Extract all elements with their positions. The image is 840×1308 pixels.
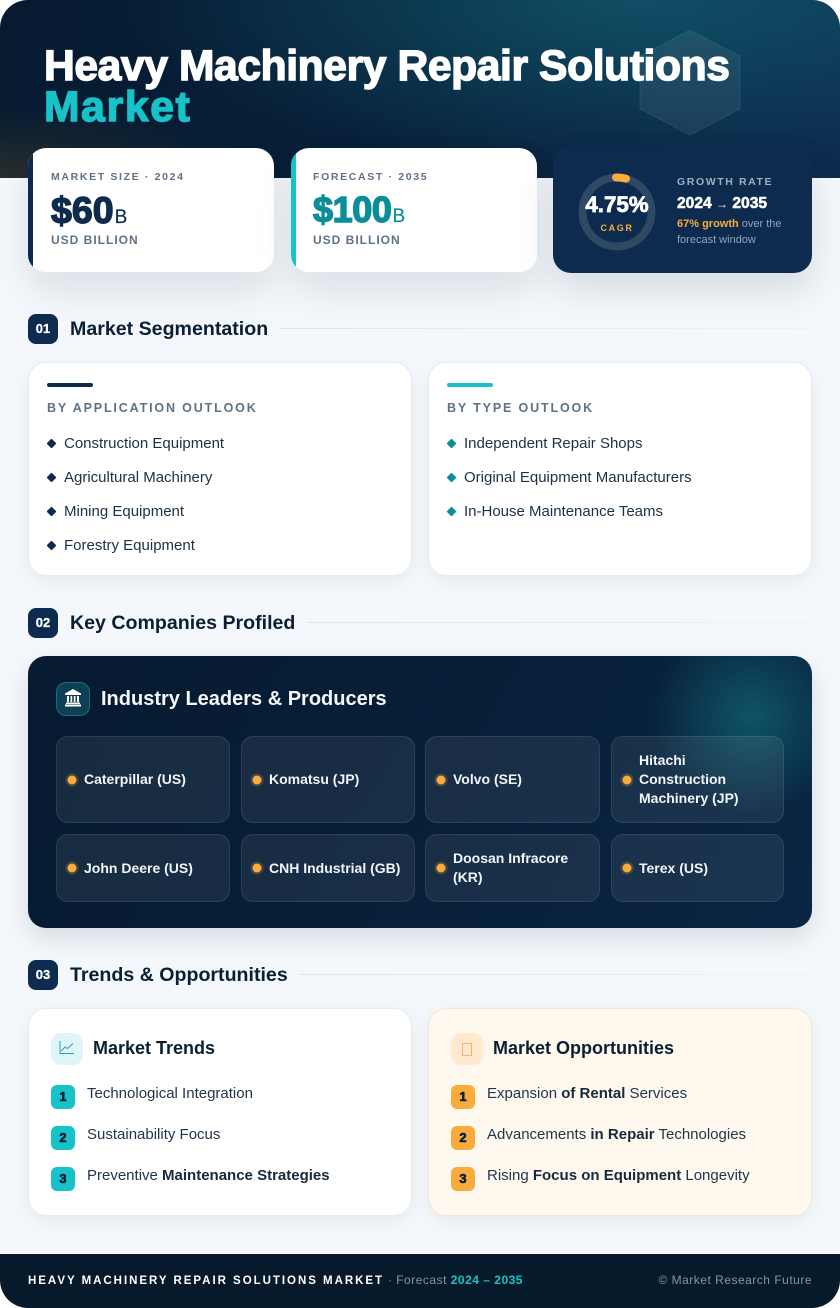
panel: application outlook: BY APPLICATION OUTLOOK bbox=[47, 401, 258, 415]
title: Market bbox=[44, 83, 192, 131]
panel: type outlook: BY TYPE OUTLOOK bbox=[447, 401, 594, 415]
section heading: 01 bbox=[28, 314, 740, 344]
icon: classical building bbox=[56, 682, 90, 716]
panel: market opportunities: Expansion of Rental Services bbox=[487, 1085, 687, 1102]
company: Komatsu: Komatsu (JP) bbox=[269, 771, 359, 787]
CAGR value: 4.75% bbox=[585, 192, 649, 217]
panel: market trends: Market Trends bbox=[93, 1038, 215, 1058]
trend 2: 2 bbox=[59, 1130, 67, 1145]
section heading: 03: 03 bbox=[36, 967, 50, 982]
company: Volvo: Volvo (SE) bbox=[453, 771, 522, 787]
panel: application outlook: Forestry Equipment bbox=[64, 537, 195, 554]
panel: type outlook: In-House Maintenance Teams bbox=[464, 503, 663, 520]
opportunity 3: 3 bbox=[459, 1171, 467, 1186]
panel: market opportunities: Rising Focus on Equipment Longevity bbox=[487, 1167, 750, 1184]
panel: market trends: Preventive Maintenance Strategies bbox=[87, 1167, 330, 1184]
section heading: 03: Trends & Opportunities bbox=[70, 964, 288, 986]
company: Terex bbox=[611, 834, 784, 902]
company: Hitachi: Construction bbox=[639, 771, 726, 787]
panel: type outlook bbox=[428, 362, 812, 576]
panel: type outlook: Independent Repair Shops bbox=[464, 435, 642, 452]
icon: placeholder glyph bbox=[451, 1033, 483, 1065]
company: Volvo bbox=[425, 736, 600, 823]
company: Hitachi: Hitachi bbox=[639, 752, 686, 768]
company: CNH Industrial: CNH Industrial (GB) bbox=[269, 860, 400, 876]
footer bbox=[0, 1254, 840, 1308]
panel: type outlook: Original Equipment Manufacturers bbox=[464, 469, 692, 486]
company: Caterpillar bbox=[56, 736, 230, 823]
company: Hitachi: Machinery (JP) bbox=[639, 790, 739, 806]
panel: market opportunities: Advancements in Repair Technologies bbox=[487, 1126, 746, 1143]
company: Terex: Terex (US) bbox=[639, 860, 708, 876]
company: John Deere: John Deere (US) bbox=[84, 860, 193, 876]
panel: application outlook bbox=[28, 362, 412, 576]
decorative hexagon bbox=[640, 30, 740, 136]
donut gauge bbox=[578, 174, 656, 250]
company: Doosan Infracore bbox=[425, 834, 600, 902]
title bbox=[44, 42, 729, 131]
company: Caterpillar: Caterpillar (US) bbox=[84, 771, 186, 787]
panel: application outlook: Construction Equipment bbox=[64, 435, 224, 452]
section heading: 02 bbox=[28, 608, 744, 638]
panel: industry leaders bbox=[28, 656, 812, 928]
stat card: forecast: FORECAST · 2035 bbox=[313, 171, 428, 183]
company: Doosan Infracore: Doosan Infracore bbox=[453, 850, 568, 866]
footer credit: © Market Research Future bbox=[658, 1273, 812, 1287]
stat card: market size: $60B bbox=[51, 189, 127, 231]
company: Doosan Infracore: (KR) bbox=[453, 869, 483, 885]
trend 1: 1 bbox=[59, 1089, 67, 1104]
panel: application outlook: Agricultural Machinery bbox=[64, 469, 212, 486]
stat card: forecast bbox=[291, 148, 537, 273]
opportunity 2: 2 bbox=[459, 1130, 467, 1145]
footer title: HEAVY MACHINERY REPAIR SOLUTIONS MARKET · Forecast 2024 – 2035 bbox=[28, 1273, 523, 1287]
section heading: 02: Key Companies Profiled bbox=[70, 612, 295, 634]
company: CNH Industrial bbox=[241, 834, 415, 902]
opportunity 3 bbox=[451, 1167, 475, 1191]
stat card: market size: MARKET SIZE · 2024 bbox=[51, 171, 185, 183]
trend 1 bbox=[51, 1085, 75, 1109]
company: John Deere bbox=[56, 834, 230, 902]
growth note: forecast window bbox=[677, 234, 756, 246]
panel: application outlook: Mining Equipment bbox=[64, 503, 184, 520]
header background bbox=[0, 0, 840, 178]
panel: market trends: Technological Integration bbox=[87, 1085, 253, 1102]
opportunity 1: 1 bbox=[459, 1089, 467, 1104]
section heading: 01: 01 bbox=[36, 321, 50, 336]
section heading: 03 bbox=[28, 960, 740, 990]
stat card: forecast: USD BILLION bbox=[313, 233, 401, 247]
company: Komatsu bbox=[241, 736, 415, 823]
company: Hitachi bbox=[611, 736, 784, 823]
stat card: forecast: $100B bbox=[313, 189, 405, 230]
panel: market trends bbox=[28, 1008, 412, 1216]
icon: line chart bbox=[51, 1033, 83, 1065]
panel: market trends: Sustainability Focus bbox=[87, 1126, 220, 1143]
section heading: 02: 02 bbox=[36, 615, 50, 630]
opportunity 2 bbox=[451, 1126, 475, 1150]
stat card: CAGR bbox=[553, 146, 812, 273]
panel: market opportunities bbox=[428, 1008, 812, 1216]
growth note bbox=[677, 218, 782, 246]
stat card: market size: USD BILLION bbox=[51, 233, 139, 247]
panel heading: Industry Leaders & Producers bbox=[101, 688, 387, 710]
period: 2024 → 2035 bbox=[677, 195, 767, 212]
trend 3: 3 bbox=[59, 1171, 67, 1186]
growth note: 67% growth over the bbox=[677, 218, 782, 230]
opportunity 1 bbox=[451, 1085, 475, 1109]
panel: market opportunities: Market Opportunities bbox=[493, 1038, 674, 1058]
trend 2 bbox=[51, 1126, 75, 1150]
section heading: 01: Market Segmentation bbox=[70, 318, 268, 340]
trend 3 bbox=[51, 1167, 75, 1191]
growth rate label: GROWTH RATE bbox=[677, 176, 773, 188]
stat card: market size bbox=[28, 148, 274, 273]
title: Heavy Machinery Repair Solutions bbox=[44, 42, 729, 90]
CAGR label: CAGR bbox=[601, 223, 633, 233]
